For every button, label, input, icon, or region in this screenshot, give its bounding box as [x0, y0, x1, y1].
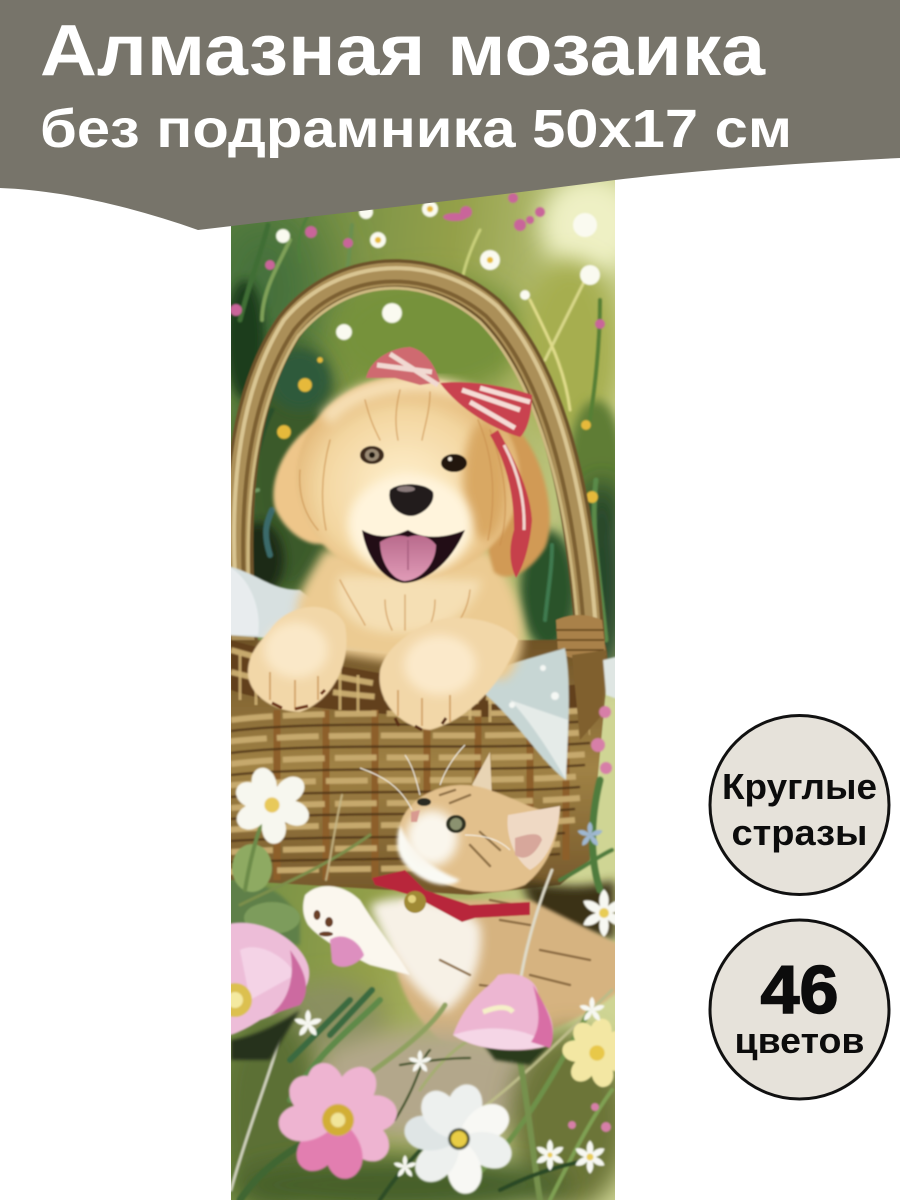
- foreground meadow: [220, 780, 630, 1200]
- right paw: [379, 618, 518, 730]
- grass blades and small top flowers: [231, 212, 606, 640]
- large white flower bottom: [402, 1082, 517, 1197]
- nose: [389, 484, 433, 516]
- red striped ribbon: [366, 347, 532, 578]
- badge: 46 colours: цветов: [734, 1020, 864, 1061]
- tongue: [380, 535, 436, 581]
- middle pink flower: [453, 974, 553, 1050]
- left ear: [270, 420, 324, 547]
- puppy: [248, 347, 550, 730]
- left paw: [248, 607, 347, 712]
- badge: 46 colours: [710, 920, 889, 1099]
- red collar with bell: [372, 870, 530, 922]
- head: [400, 785, 560, 892]
- handle knot: [556, 615, 606, 659]
- basket body: [222, 615, 615, 940]
- kitten: [303, 745, 620, 1044]
- head: [296, 376, 520, 580]
- yellow flower: [561, 1018, 615, 1088]
- painted meadow background: [231, 180, 615, 1200]
- subtitle: без подрамника 50х17 см: [40, 99, 792, 159]
- header banner: [0, 0, 900, 230]
- eyes and nose: [417, 798, 431, 806]
- badge: 46 colours: 46: [760, 952, 838, 1028]
- raised paw: [303, 886, 410, 975]
- whiskers: [360, 745, 510, 850]
- large pink flower bottom: [277, 1058, 400, 1182]
- body: [393, 900, 620, 1044]
- eyes: [360, 446, 467, 472]
- big left pink flower: [231, 921, 310, 1036]
- body: [296, 550, 523, 680]
- muzzle highlight: [348, 475, 472, 575]
- badge: round rhinestones: Круглые: [722, 766, 877, 807]
- title: Алмазная мозаика: [40, 11, 766, 91]
- daisy on basket: [232, 764, 313, 845]
- ear: [507, 806, 560, 870]
- shadow under kitten: [520, 880, 615, 940]
- tabby stripes: [440, 790, 590, 990]
- wicker basket handle: [234, 268, 596, 640]
- right ear: [488, 433, 552, 578]
- product picture: diamond mosaic: [231, 180, 615, 1200]
- back ear: [472, 752, 492, 800]
- small white blossoms: [293, 706, 627, 1178]
- fur strokes: [300, 390, 505, 630]
- small pink bud: [330, 936, 364, 967]
- badge: round rhinestones: [710, 716, 889, 894]
- white blanket: [225, 565, 620, 780]
- open mouth: [362, 530, 465, 583]
- badge: round rhinestones: стразы: [732, 812, 868, 853]
